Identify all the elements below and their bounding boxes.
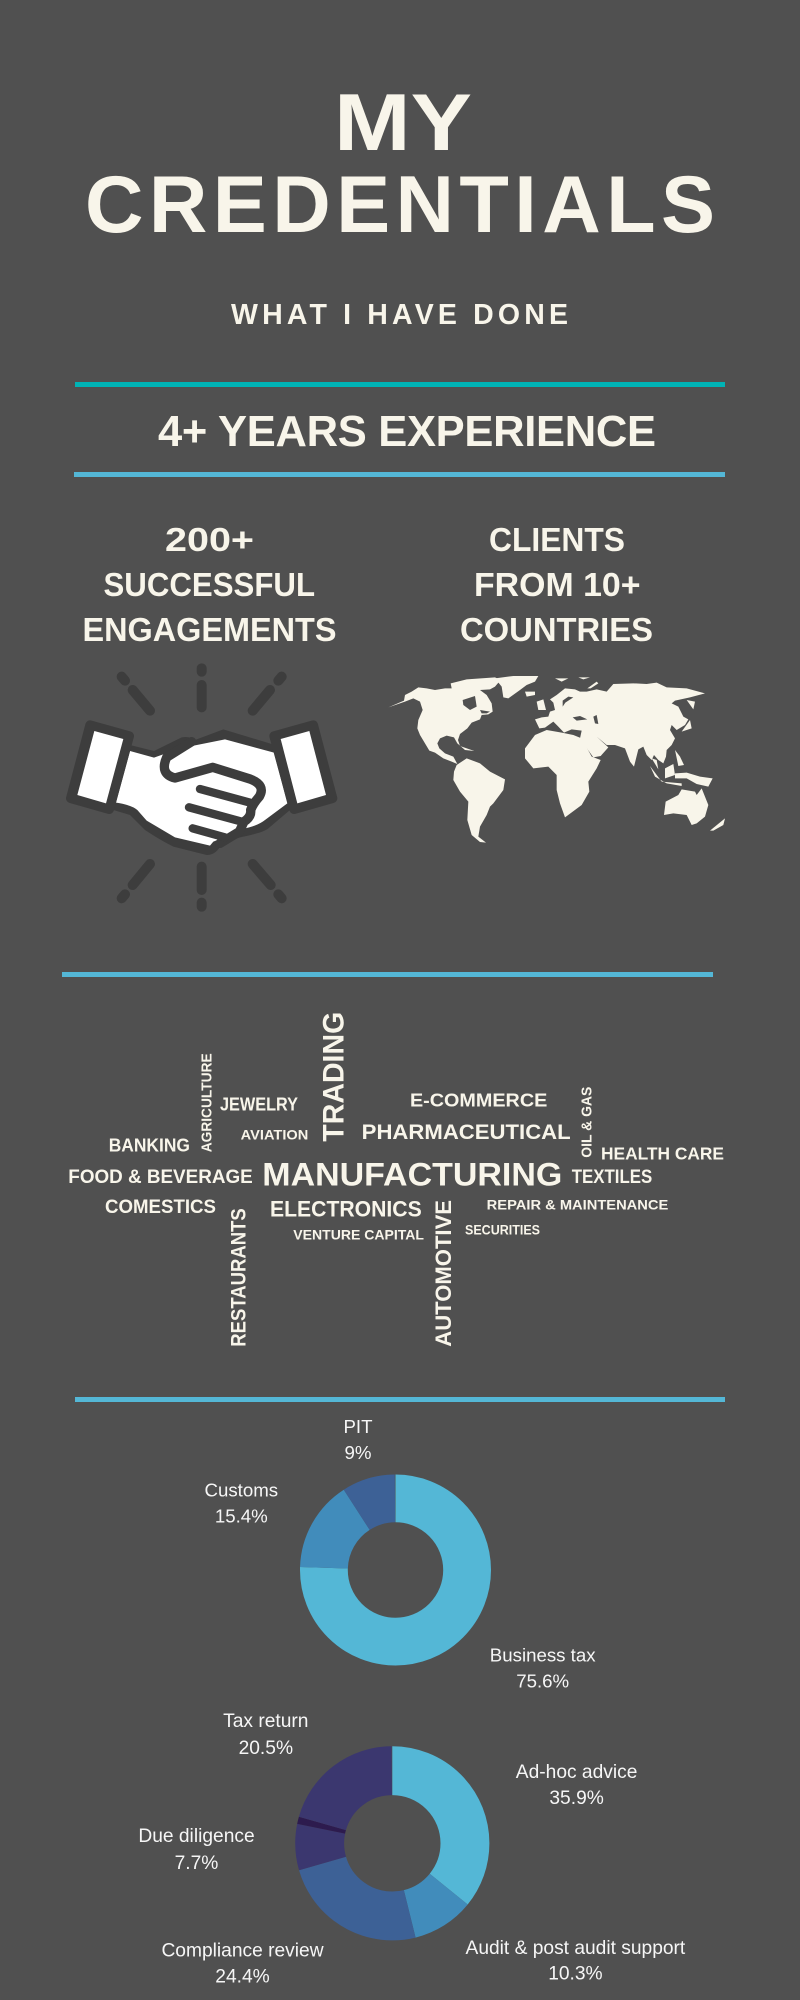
label: Due diligence: Due diligence bbox=[138, 1826, 255, 1847]
word cloud: industries: REPAIR & MAINTENANCE bbox=[487, 1197, 668, 1213]
label: PIT bbox=[343, 1416, 373, 1463]
word cloud: industries: AVIATION bbox=[241, 1127, 308, 1142]
heading: years of experience: 4+ YEARS EXPERIENCE bbox=[158, 408, 656, 456]
word cloud: industries bbox=[68, 1012, 724, 1347]
title bbox=[85, 78, 715, 250]
word cloud: industries: TEXTILES bbox=[572, 1166, 652, 1188]
stat: clients from countries bbox=[460, 521, 653, 648]
label: Tax return: Tax return bbox=[223, 1711, 308, 1732]
icon: handshake bbox=[71, 668, 333, 907]
label: Audit and post audit support: 10.3% bbox=[548, 1963, 603, 1984]
word cloud: industries: BANKING bbox=[109, 1136, 190, 1156]
icon: world map bbox=[388, 676, 725, 843]
label: Tax return: 20.5% bbox=[239, 1738, 293, 1759]
label: Audit and post audit support bbox=[466, 1938, 686, 1984]
label: Audit and post audit support: Audit & post audit support bbox=[466, 1938, 686, 1959]
word cloud: industries: JEWELRY bbox=[220, 1095, 298, 1115]
title: MY bbox=[334, 78, 472, 168]
label: Due diligence: 7.7% bbox=[175, 1853, 218, 1874]
word cloud: industries: SECURITIES bbox=[465, 1222, 540, 1238]
word cloud: industries: AUTOMOTIVE bbox=[431, 1200, 456, 1347]
label: Ad-hoc advice: 35.9% bbox=[549, 1788, 604, 1809]
stat: clients from countries: COUNTRIES bbox=[460, 611, 653, 648]
donut chart: service types bbox=[138, 1711, 686, 1987]
word cloud: industries: RESTAURANTS bbox=[227, 1208, 251, 1347]
label: Customs bbox=[204, 1480, 278, 1526]
title: CREDENTIALS bbox=[85, 160, 715, 250]
label: Customs: Customs bbox=[204, 1480, 278, 1501]
label: Compliance review: 24.4% bbox=[215, 1966, 270, 1987]
word cloud: industries: PHARMACEUTICAL bbox=[362, 1120, 571, 1144]
label: Business tax: 75.6% bbox=[516, 1670, 569, 1691]
word cloud: industries: OIL & GAS bbox=[579, 1087, 596, 1158]
word cloud: industries: ELECTRONICS bbox=[270, 1196, 422, 1221]
stat: clients from countries: FROM 10+ bbox=[474, 566, 640, 603]
word cloud: industries: FOOD & BEVERAGE bbox=[68, 1166, 253, 1188]
label: PIT: 9% bbox=[345, 1442, 371, 1463]
label: Ad-hoc advice: Ad-hoc advice bbox=[516, 1762, 637, 1783]
stat: successful engagements bbox=[82, 521, 336, 648]
stat: successful engagements: ENGAGEMENTS bbox=[82, 611, 336, 648]
word cloud: industries: COMESTICS bbox=[105, 1196, 216, 1218]
label: PIT: PIT bbox=[343, 1416, 373, 1437]
label: Compliance review: Compliance review bbox=[161, 1941, 324, 1962]
label: Business tax: Business tax bbox=[490, 1645, 596, 1666]
subtitle: WHAT I HAVE DONE bbox=[231, 299, 568, 331]
word cloud: industries: AGRICULTURE bbox=[199, 1053, 216, 1152]
donut chart: tax services bbox=[204, 1416, 596, 1691]
label: Compliance review bbox=[161, 1941, 324, 1987]
stat: successful engagements: SUCCESSFUL bbox=[104, 566, 315, 603]
stat: clients from countries: CLIENTS bbox=[489, 521, 625, 558]
label: Customs: 15.4% bbox=[215, 1505, 268, 1526]
word cloud: industries: VENTURE CAPITAL bbox=[293, 1227, 424, 1242]
stat: successful engagements: 200+ bbox=[165, 521, 254, 558]
word cloud: industries: HEALTH CARE bbox=[601, 1143, 724, 1163]
word cloud: industries: TRADING bbox=[317, 1012, 350, 1142]
word cloud: industries: E-COMMERCE bbox=[410, 1090, 547, 1110]
word cloud: industries: MANUFACTURING bbox=[262, 1156, 562, 1192]
label: Business tax bbox=[490, 1645, 596, 1691]
label: Due diligence bbox=[138, 1826, 255, 1874]
label: Tax return bbox=[223, 1711, 308, 1759]
label: Ad-hoc advice bbox=[516, 1762, 637, 1809]
